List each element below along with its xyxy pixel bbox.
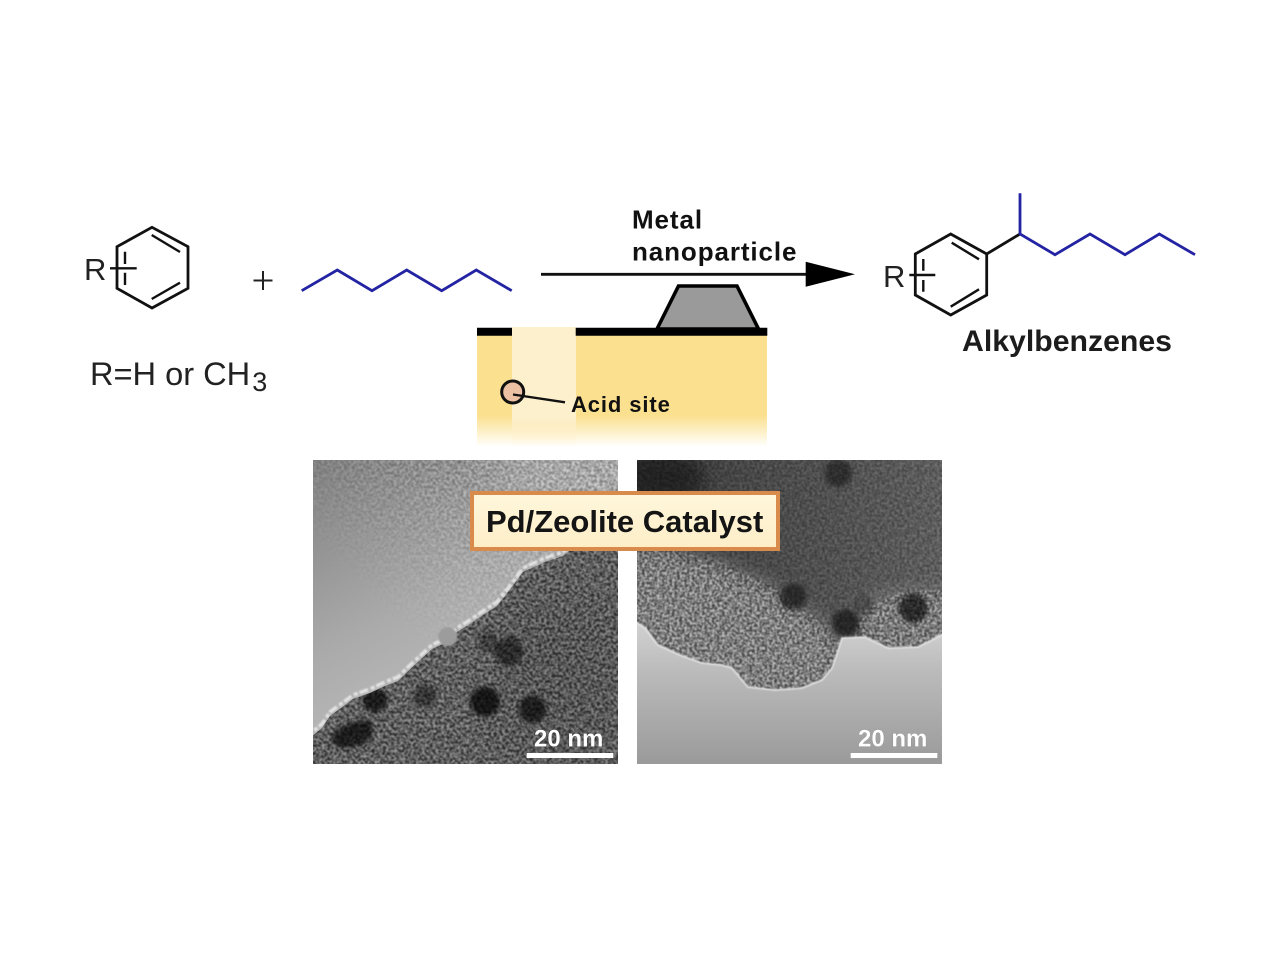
scale bar right (850, 730, 938, 758)
catalyst label box (472, 493, 778, 549)
reactant: substituted benzene (84, 227, 188, 308)
nanoparticles (780, 459, 928, 636)
surface layer (477, 328, 767, 336)
metal nanoparticle label: nanoparticle (632, 237, 797, 267)
scale bar left (526, 730, 614, 758)
scale bar right: 20 nm (858, 726, 927, 753)
R definition text: 3 (252, 367, 267, 397)
nanoparticles (331, 632, 546, 748)
metal nanoparticle label (632, 205, 797, 267)
TEM micrograph right (637, 460, 942, 764)
scale bar left: 20 nm (534, 726, 603, 753)
reaction arrow (541, 262, 855, 287)
plus sign (254, 271, 272, 290)
catalyst label box: Pd/Zeolite Catalyst (486, 504, 763, 539)
metal nanoparticle (657, 286, 758, 329)
product name: Alkylbenzenes (962, 325, 1172, 358)
metal nanoparticle label: Metal (632, 205, 703, 235)
TEM micrograph left (313, 460, 618, 764)
zeolite support (477, 335, 767, 447)
acid site label: Acid site (571, 392, 671, 417)
reactant: blue alkene chain (302, 270, 512, 291)
R definition text: R=H or CH (90, 355, 250, 392)
reactant: substituted benzene: R (84, 252, 106, 287)
catalyst schematic (477, 286, 767, 447)
product: alkylbenzene structure: R (883, 259, 905, 294)
acid site marker (502, 381, 565, 403)
product: alkylbenzene structure (883, 193, 1195, 315)
pore channel (512, 327, 576, 447)
